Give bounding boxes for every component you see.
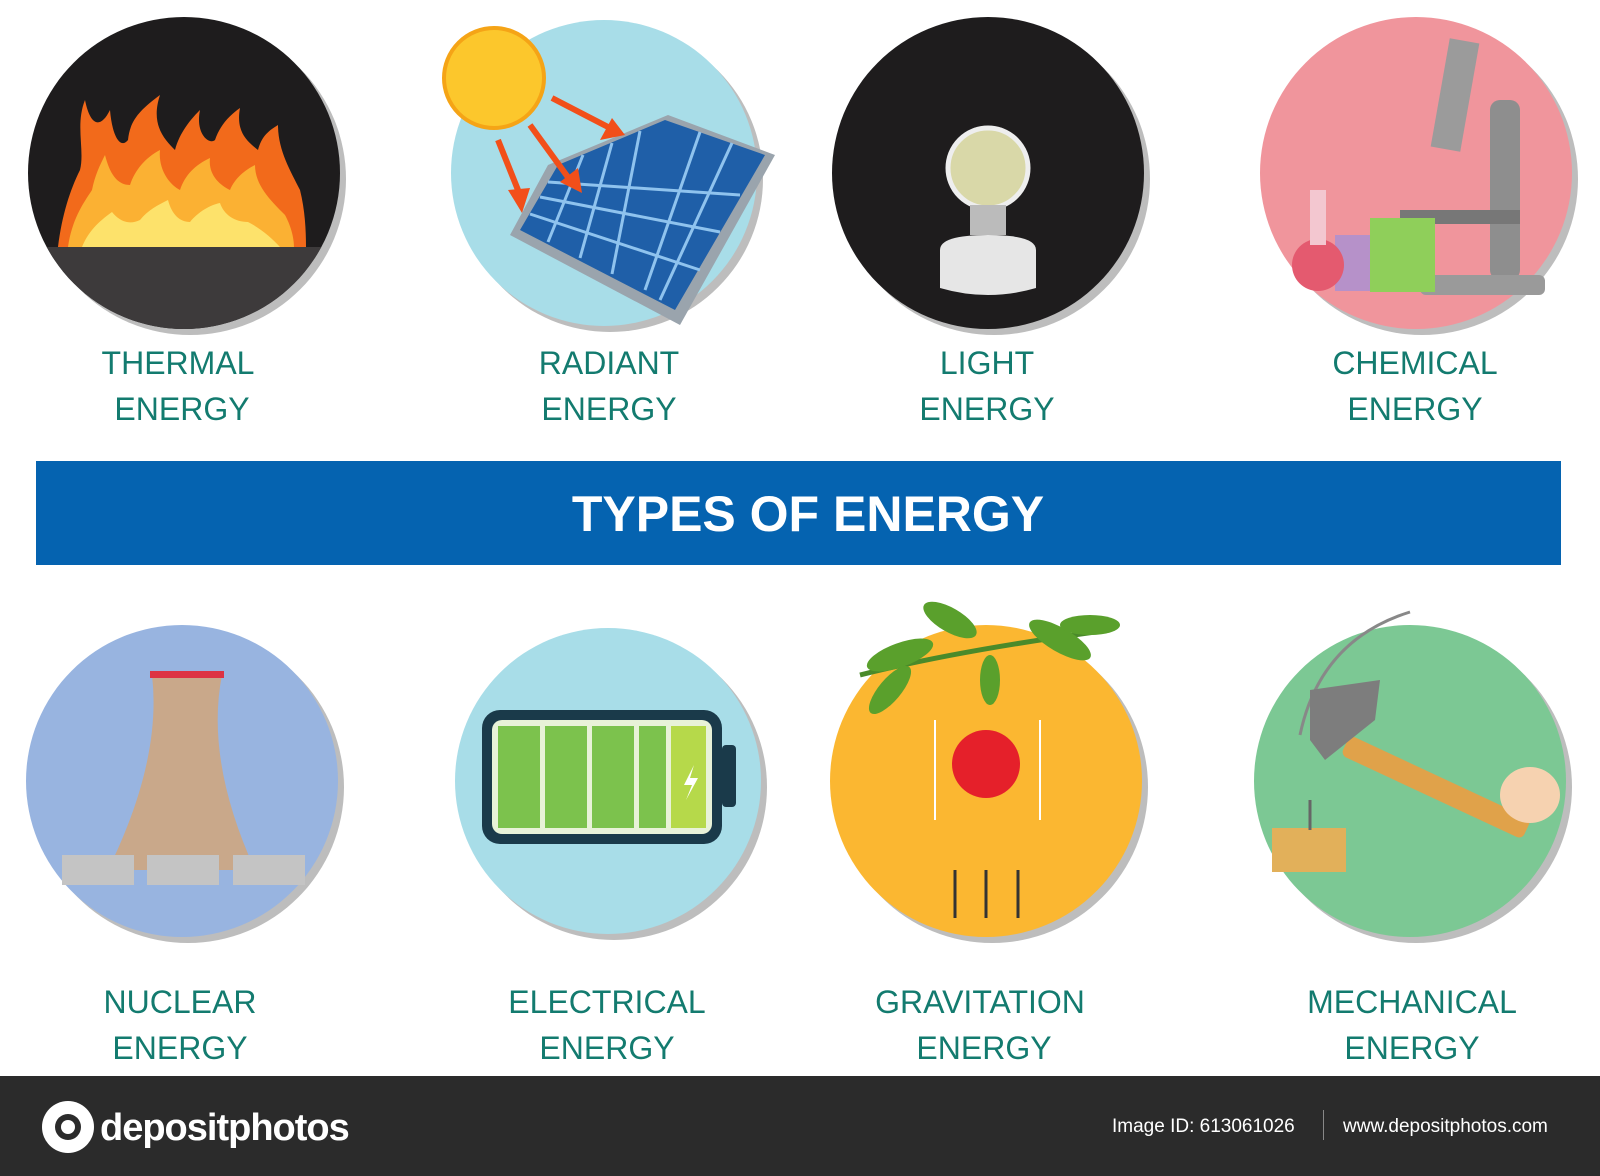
icon: solar panel [510, 115, 775, 325]
image id text: Image ID: 613061026 [1112, 1116, 1295, 1137]
title banner [36, 461, 1561, 565]
panel: light energy [832, 17, 1150, 335]
panel: radiant energy [444, 20, 775, 332]
label: gravitation [875, 984, 1085, 1066]
footer bar [0, 1076, 1600, 1176]
label: chemical: ENERGY [1347, 391, 1483, 427]
logo: depositphotos [100, 1107, 349, 1149]
label: nuclear: NUCLEAR [104, 984, 256, 1020]
icon: flames [58, 95, 306, 247]
icon: sun with arrows [444, 28, 625, 213]
label: radiant: RADIANT [539, 345, 679, 381]
panel: chemical energy [1260, 17, 1578, 335]
label: light: LIGHT [940, 345, 1034, 381]
image id text [1112, 1110, 1548, 1140]
panel: gravitation energy [830, 595, 1148, 943]
label: gravitation: GRAVITATION [875, 984, 1085, 1020]
label: mechanical: ENERGY [1344, 1030, 1480, 1066]
image id text: www.depositphotos.com [1342, 1116, 1548, 1137]
icon: hammer and nail [1272, 612, 1560, 872]
label: gravitation: ENERGY [916, 1030, 1052, 1066]
label: radiant: ENERGY [541, 391, 677, 427]
label: thermal: ENERGY [114, 391, 250, 427]
label: thermal [102, 345, 254, 427]
label: mechanical [1307, 984, 1517, 1066]
icon: battery [482, 710, 736, 844]
label: nuclear: ENERGY [112, 1030, 248, 1066]
label: radiant [539, 345, 679, 427]
label: electrical: ELECTRICAL [508, 984, 706, 1020]
icon: microscope and beakers [1292, 38, 1545, 295]
panel: nuclear energy [26, 625, 344, 943]
panel: thermal energy [20, 17, 350, 347]
label: light [919, 345, 1055, 427]
label: electrical [508, 984, 706, 1066]
panel: electrical energy [455, 628, 767, 940]
label: mechanical: MECHANICAL [1307, 984, 1517, 1020]
label: chemical [1332, 345, 1498, 427]
label: light: ENERGY [919, 391, 1055, 427]
title banner: TYPES OF ENERGY [572, 486, 1044, 542]
icon: apple on branch [860, 595, 1120, 918]
icon: light bulb [940, 128, 1036, 295]
panel: mechanical energy [1254, 612, 1572, 943]
label: electrical: ENERGY [539, 1030, 675, 1066]
logo [42, 1101, 349, 1153]
label: thermal: THERMAL [102, 345, 254, 381]
label: nuclear [104, 984, 256, 1066]
label: chemical: CHEMICAL [1332, 345, 1498, 381]
icon: cooling tower [62, 671, 305, 885]
